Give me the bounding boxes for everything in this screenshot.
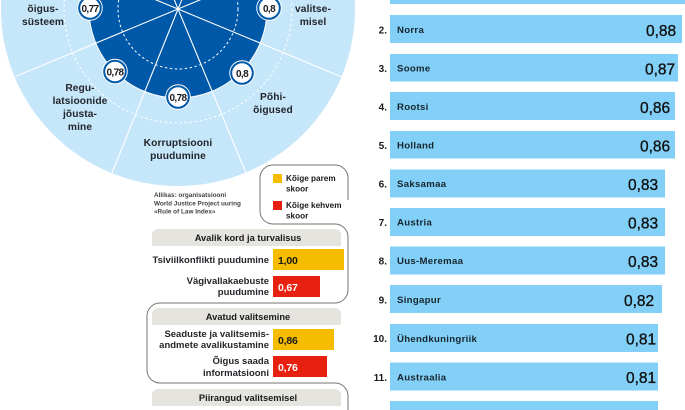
bar: Holland	[379, 131, 675, 158]
radial chart	[1, 0, 355, 186]
panel: avalik kord ja turvalisus	[152, 229, 344, 298]
panel: avatud valitsemine: informatsiooni	[203, 368, 269, 379]
bar: Uus-Meremaa: 8.	[379, 256, 387, 268]
bar: Soome: 0,87	[645, 62, 675, 78]
bar: Rootsi	[379, 92, 675, 120]
bar: Singapur: Singapur	[397, 295, 441, 306]
bar: Austria: 7.	[379, 218, 387, 229]
panel: avalik kord ja turvalisus: Avalik kord ja turvalisus	[195, 233, 301, 243]
panel: avalik kord ja turvalisus: 1,00	[278, 255, 298, 267]
bar: next rank	[390, 401, 658, 410]
panel outline	[147, 165, 348, 410]
panel: avatud valitsemine: Seaduste ja valitsemis-	[164, 329, 269, 340]
score badge: õigussüsteem: 0,77	[81, 4, 100, 15]
bar: Uus-Meremaa: 0,83	[628, 254, 658, 271]
bar: Ühendkuningriik: Ühendkuningriik	[397, 334, 478, 345]
bar: Norra: 0,88	[646, 23, 676, 40]
bar: Austraalia: 11.	[374, 373, 387, 384]
bar: Holland: Holland	[397, 140, 434, 152]
score badge: piirangud valitsemisel	[257, 0, 281, 20]
bar: Uus-Meremaa: Uus-Meremaa	[397, 256, 464, 267]
bar: Austraalia: Austraalia	[397, 372, 447, 384]
score badge: regulatsioonide jõustamine	[103, 60, 127, 84]
legend	[273, 174, 342, 220]
sector label: põhiõigused	[253, 92, 293, 116]
bar: Saksamaa	[379, 170, 665, 198]
legend: skoor	[286, 212, 309, 220]
bar: Rootsi: 0,86	[640, 100, 670, 117]
bar: Saksamaa: 0,83	[628, 177, 658, 194]
score badge: piirangud valitsemisel: 0,8	[263, 4, 276, 15]
bar: Austraalia	[374, 362, 658, 390]
sector label: korruptsiooni puudumine	[144, 138, 212, 162]
score badge: regulatsioonide jõustamine: 0,78	[106, 68, 125, 78]
bar: Ühendkuningriik: 0,81	[626, 332, 656, 348]
sector label: piirangud valitsemisel: valitse-	[295, 4, 331, 15]
panel: piirangud valitsemisel	[152, 389, 341, 406]
bar: Austraalia: 0,81	[626, 370, 656, 387]
bar: Singapur: 0,82	[624, 293, 654, 310]
panel: piirangud valitsemisel: Piirangud valitsemisel	[199, 393, 297, 403]
bar: Saksamaa: 6.	[379, 180, 387, 190]
panel: avatud valitsemine: Õigus saada	[212, 356, 270, 367]
panel: avalik kord ja turvalisus: 0,67	[278, 282, 298, 294]
score badge: põhiõigused: 0,8	[236, 69, 249, 80]
sector label: õigussüsteem: õigus-	[27, 4, 59, 15]
bar: Holland: 0,86	[640, 138, 670, 156]
sector label: korruptsiooni puudumine: Korruptsiooni	[144, 138, 212, 149]
bar: Norra	[379, 15, 682, 43]
sector label: regulatsioonide jõustamine	[53, 83, 108, 133]
score badge: korruptsiooni puudumine: 0,78	[169, 93, 188, 104]
sector label: regulatsioonide jõustamine: mine	[68, 122, 92, 133]
bar: Rootsi: Rootsi	[397, 102, 429, 113]
panel: avatud valitsemine: 0,86	[278, 335, 298, 347]
bar: top rank	[390, 0, 685, 4]
panel: avatud valitsemine: Avatud valitsemine	[206, 312, 290, 322]
sector label: regulatsioonide jõustamine: jõusta-	[62, 109, 97, 120]
score badge: põhiõigused	[230, 61, 254, 85]
bar: Norra: Norra	[397, 25, 424, 36]
source note: «Rule of Law Index»	[154, 208, 216, 216]
bar: Soome	[379, 54, 678, 82]
sector label: piirangud valitsemisel	[289, 0, 337, 28]
bar: Uus-Meremaa	[379, 246, 665, 274]
source note	[154, 192, 241, 216]
sector label: regulatsioonide jõustamine: Regu-	[65, 83, 95, 94]
sector label: piirangud valitsemisel: misel	[300, 17, 326, 28]
sector label: õigussüsteem: süsteem	[22, 17, 64, 28]
sector label: õigussüsteem	[22, 4, 64, 28]
bar: Ühendkuningriik	[373, 324, 658, 352]
legend: Kõige kehvem	[286, 201, 342, 210]
bar: Holland: 5.	[379, 141, 387, 152]
source note: World Justice Project uuring	[154, 200, 241, 208]
sector label: korruptsiooni puudumine: puudumine	[150, 151, 206, 162]
bar: Saksamaa: Saksamaa	[397, 179, 447, 190]
sector label: regulatsioonide jõustamine: latsioonide	[53, 96, 108, 107]
legend: skoor	[286, 184, 309, 194]
source note: Allikas: organisatsiooni	[154, 192, 226, 199]
bar: Rootsi: 4.	[379, 102, 387, 114]
bar: Soome: Soome	[397, 64, 430, 74]
panel: avalik kord ja turvalisus: Vägivallakaebuste	[187, 276, 269, 287]
bar: Norra: 2.	[379, 26, 387, 36]
panel: avatud valitsemine	[152, 308, 341, 379]
bar: Singapur	[379, 285, 662, 313]
bar: Ühendkuningriik: 10.	[373, 334, 387, 345]
score badge: õigussüsteem	[78, 0, 102, 20]
sector label: põhiõigused: õigused	[253, 105, 293, 116]
panel: avatud valitsemine: 0,76	[278, 362, 298, 374]
sector label: põhiõigused: Põhi-	[260, 92, 286, 103]
bar: Austria	[379, 208, 665, 236]
score badge: korruptsiooni puudumine	[166, 85, 190, 109]
legend: Kõige parem	[286, 174, 336, 183]
panel: avalik kord ja turvalisus: puudumine	[218, 287, 269, 298]
bar: Singapur: 9.	[379, 296, 387, 306]
bar: Austria: 0,83	[628, 216, 658, 232]
panel: avatud valitsemine: andmete avalikustamine	[159, 340, 269, 351]
panel: avalik kord ja turvalisus: Tsiviilkonflikti puudumine	[153, 255, 269, 266]
bar: Soome: 3.	[379, 64, 387, 75]
bar: Austria: Austria	[397, 218, 433, 228]
country ranking bars	[373, 0, 685, 410]
